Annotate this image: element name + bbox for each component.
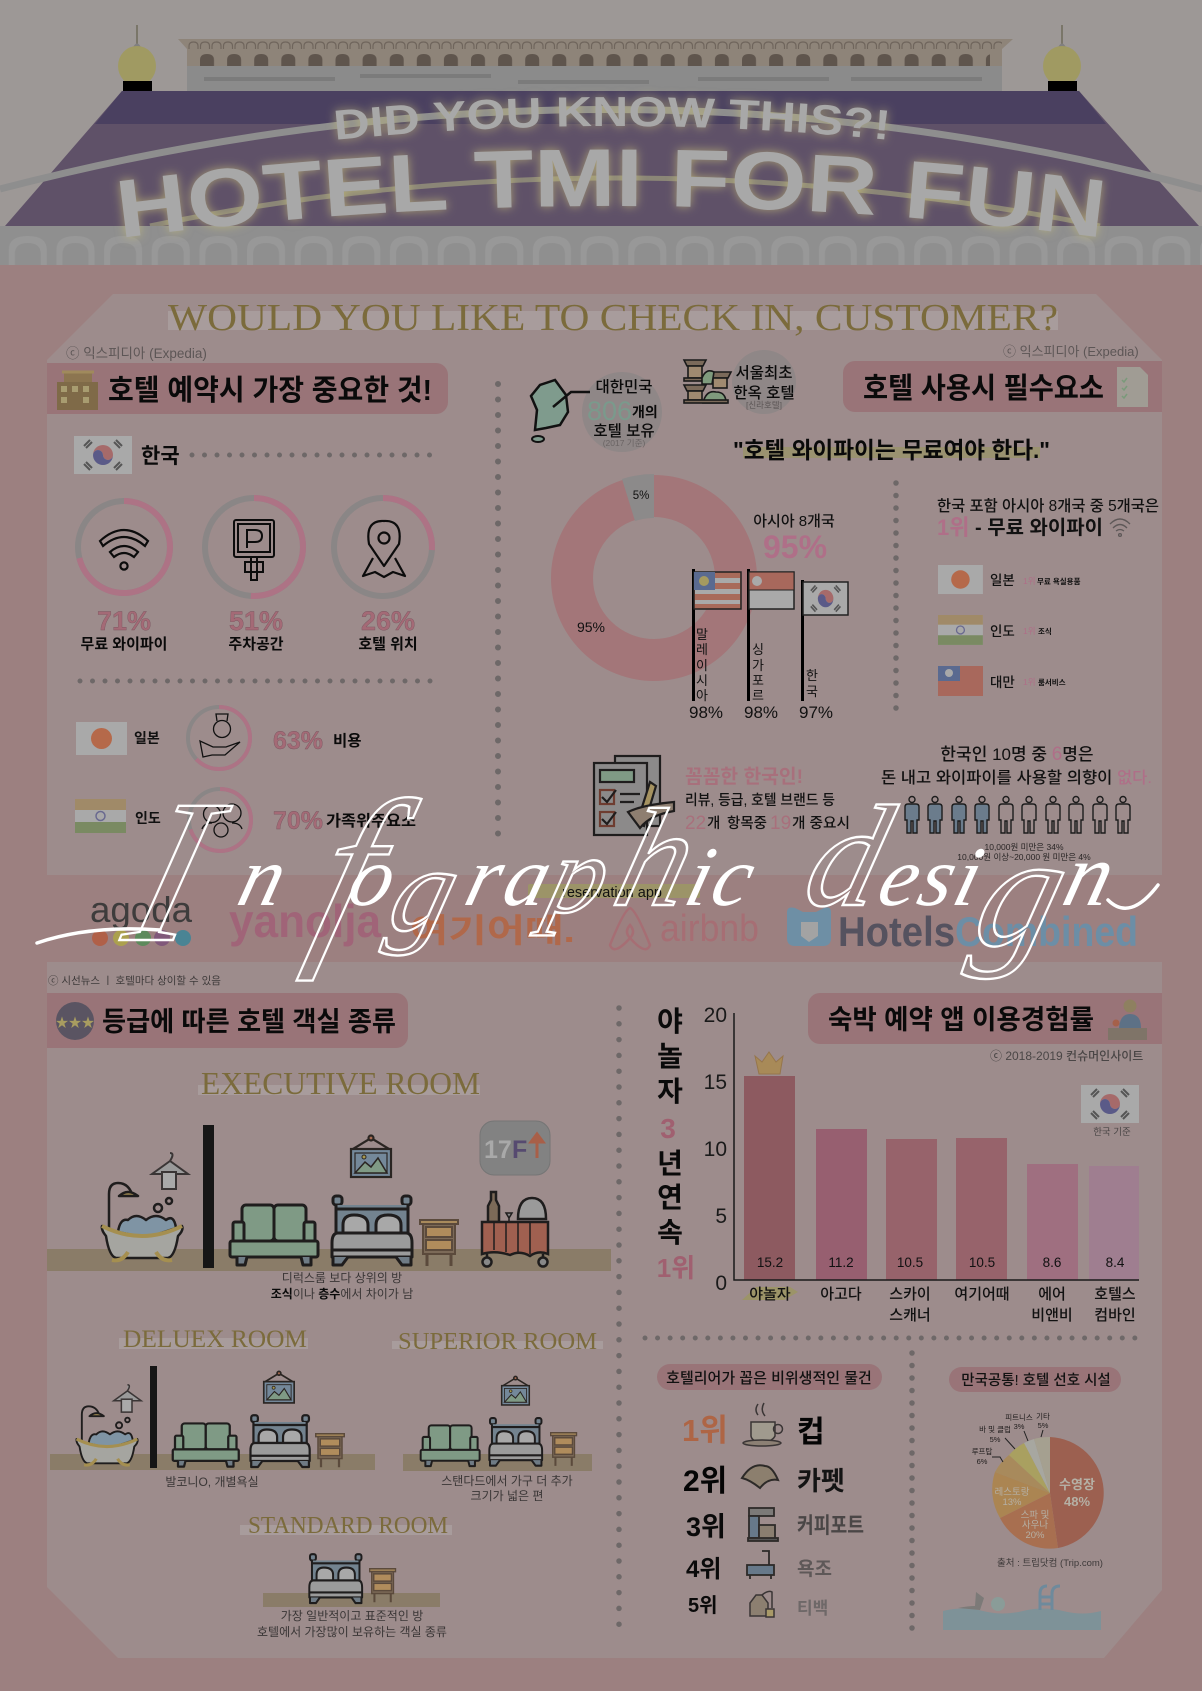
- logo: hotelscombined: [787, 908, 1138, 955]
- section heading: [808, 993, 1162, 1044]
- watermark: infographic design: [107, 758, 1144, 985]
- pie chart: 기타: [1036, 1412, 1050, 1421]
- bar chart: 15: [704, 1071, 727, 1094]
- icon: receptionist: [1108, 1000, 1147, 1040]
- rank 2 carpet: 카펫: [797, 1466, 845, 1496]
- pie chart: 5%: [1038, 1421, 1049, 1430]
- executive room scene: [47, 1121, 611, 1271]
- icon: small wifi: [1110, 519, 1130, 536]
- logo: hotelscombined: Hotels: [838, 908, 955, 955]
- bar chart: 에어: [1038, 1286, 1066, 1303]
- bar chart: 10.5: [897, 1255, 923, 1270]
- korea standard note: 한국 기준: [1093, 1127, 1131, 1138]
- pie source: 출처 : 트립닷컴 (Trip.com): [997, 1557, 1103, 1569]
- value 70: 70%: [273, 807, 323, 835]
- meticulous koreans text: 22: [685, 813, 706, 834]
- executive caption: 조식이나 층수에서 차이가 남: [271, 1287, 413, 1301]
- meticulous koreans text: 개: [707, 815, 720, 832]
- rank 4 tub: [686, 1551, 832, 1583]
- watermark: infographic design: s: [910, 829, 968, 924]
- rank 5 tea bag: 5위: [688, 1594, 718, 1617]
- logo: agoda: [90, 889, 193, 946]
- meticulous koreans text: [685, 766, 850, 834]
- watermark: infographic design: o: [340, 829, 407, 924]
- flag: korea standard: [1081, 1085, 1139, 1123]
- flag: india: [75, 799, 126, 833]
- icon: room service cart: [482, 1192, 548, 1266]
- bar chart: 스캐너: [889, 1307, 931, 1324]
- japan row: 일본: [990, 573, 1015, 588]
- pie chart: 바 및 클럽: [979, 1424, 1011, 1434]
- japan row: 무료 욕실용품: [1037, 576, 1081, 586]
- pie chart: [972, 1412, 1104, 1549]
- donut chart: 95%: [577, 619, 605, 635]
- vertical slogan: 3: [660, 1113, 676, 1144]
- watermark: infographic design: d: [791, 775, 908, 936]
- japan label: 일본: [134, 730, 160, 746]
- rank 1 cup: 컵: [797, 1416, 825, 1449]
- flag: korea pole: 한: [806, 668, 818, 683]
- bar chart: 스카이: [889, 1286, 931, 1303]
- panel: room types: [47, 993, 611, 1639]
- bar chart: 10.5: [969, 1255, 995, 1270]
- taiwan row: 대만: [990, 675, 1015, 690]
- vertical slogan: 놀: [657, 1041, 683, 1072]
- value 51: 51%: [229, 606, 283, 636]
- icon: 17F badge: [480, 1121, 550, 1175]
- logo: hotelscombined: Combined: [955, 908, 1138, 955]
- pie chart: 레스토랑: [995, 1486, 1030, 1498]
- watermark: infographic design: g: [959, 804, 1087, 980]
- standard caption: [257, 1609, 447, 1639]
- heading text: 숙박 예약 앱 이용경험률: [828, 1005, 1094, 1035]
- icon: pool: [943, 1586, 1101, 1630]
- six in ten koreans text: 돈 내고 와이파이를 사용할 의향이 없다.: [881, 769, 1152, 787]
- meticulous koreans text: 리뷰, 등급, 호텔 브랜드 등: [685, 792, 835, 809]
- taiwan row: 1위: [1023, 677, 1036, 687]
- highlight for yanolja: [742, 1287, 798, 1300]
- logo band background: [47, 875, 1162, 962]
- bar chart: 컴바인: [1094, 1307, 1136, 1324]
- watermark: infographic design: i: [945, 829, 993, 924]
- flag: japan: [76, 722, 127, 755]
- panel: booking app usage: [657, 993, 1162, 1324]
- donut chart: [572, 474, 736, 660]
- superior caption: 크기가 넓은 편: [471, 1489, 543, 1503]
- icon: 17F badge: 17: [484, 1136, 512, 1164]
- meticulous koreans text: 개 중요시: [792, 815, 850, 832]
- icon: checklist with hand: [594, 756, 674, 835]
- bar chart: 5: [715, 1205, 727, 1228]
- hotel count text: 개의: [632, 404, 658, 420]
- bar chart: 비앤비: [1031, 1307, 1073, 1324]
- superior room heading: SUPERIOR ROOM: [398, 1329, 597, 1355]
- section heading: [843, 361, 1162, 412]
- panel: essentials when using hotel: [572, 344, 1162, 862]
- hotel count text: [587, 378, 658, 448]
- vertical slogan: 1위: [657, 1253, 695, 1283]
- bar chart: 아고다: [820, 1286, 862, 1303]
- icon: stars badge: [55, 1002, 95, 1040]
- flag: korea: [74, 436, 132, 474]
- icon: crown: [755, 1052, 783, 1074]
- pie chart: 13%: [1002, 1497, 1022, 1508]
- first hanok hotel text: [733, 364, 795, 410]
- bar chart: 8.4: [1106, 1255, 1125, 1270]
- icon: hanok: [684, 360, 731, 403]
- subtitle: would you like to check in: WOULD YOU LIKE TO CHECK IN, CUSTOMER?: [168, 297, 1058, 339]
- bar chart: 10: [704, 1138, 727, 1161]
- watermark: infographic design: i: [677, 829, 725, 924]
- flag: malaysia: 아: [696, 688, 708, 703]
- watermark: infographic design: h: [601, 780, 713, 935]
- meticulous koreans text: 꼼꼼한 한국인!: [685, 766, 803, 788]
- meticulous koreans text: 19: [770, 813, 791, 834]
- ring: free wifi 71%: [78, 501, 170, 593]
- india row: 인도: [990, 624, 1015, 639]
- ring: location 26%: [334, 498, 432, 596]
- first hanok hotel text: 서울최초: [735, 364, 793, 382]
- ring: cost 63%: [188, 707, 250, 769]
- icon: family: [202, 804, 242, 837]
- india row: 1위: [1023, 626, 1036, 636]
- label family: 가족위주요소: [326, 812, 416, 830]
- six in ten koreans text: 한국인 10명 중 6명은: [940, 744, 1094, 765]
- icon: map pin: [363, 521, 405, 577]
- pie chart: 6%: [977, 1457, 988, 1466]
- bar chart: 15.2: [757, 1255, 783, 1270]
- first hanok hotel text: 한옥 호텔: [733, 384, 795, 402]
- india label: 인도: [135, 810, 161, 826]
- bar chart: 호텔스: [1094, 1286, 1136, 1303]
- watermark: infographic design: p: [529, 815, 624, 937]
- vertical slogan: 년: [657, 1148, 683, 1179]
- source note: ⓒ 익스피디아 (Expedia): [1003, 344, 1139, 359]
- source note: ⓒ 2018-2019 컨슈머인사이트: [990, 1049, 1143, 1063]
- panel: reservation app logos: [90, 884, 1138, 955]
- watermark: infographic design: e: [870, 829, 933, 924]
- flag: malaysia: 이: [696, 658, 708, 673]
- inner panel: [47, 294, 1162, 1658]
- bar chart: 11.2: [828, 1255, 854, 1270]
- wifi price note: [957, 842, 1091, 862]
- pie chart: 48%: [1064, 1494, 1090, 1509]
- hotel count text: 대한민국: [595, 378, 653, 396]
- meticulous koreans text: 항목중: [727, 815, 767, 832]
- panel: korea hotel facts: [531, 350, 796, 452]
- taiwan row: [938, 666, 1066, 696]
- icon: wifi: [100, 530, 148, 570]
- ring: family 70%: [189, 789, 251, 851]
- pie chart: 스파 및: [1021, 1509, 1050, 1521]
- flag: singapore: [744, 569, 794, 722]
- hotel count text: 호텔 보유: [593, 422, 655, 440]
- bar chart: 야놀자: [749, 1286, 791, 1303]
- watermark: infographic design: a: [495, 829, 562, 924]
- pill heading: [949, 1367, 1121, 1392]
- logo: yanolja: yanolja: [229, 895, 381, 947]
- asia rank headline: 한국 포함 아시아 8개국 중 5개국은: [937, 497, 1159, 515]
- flag: singapore: 포: [752, 673, 764, 688]
- japan row: [938, 565, 1081, 594]
- asia rank headline: [937, 497, 1159, 540]
- icon: korea map: [531, 380, 590, 442]
- rank 5 tea bag: [688, 1591, 828, 1618]
- flag: korea pole: 97%: [799, 703, 833, 722]
- donut chart: 5%: [633, 490, 649, 502]
- standard room heading: STANDARD ROOM: [248, 1513, 448, 1539]
- rank 3 coffee pot: 커피포트: [797, 1513, 864, 1538]
- pie chart: 5%: [990, 1435, 1001, 1444]
- watermark: infographic design: g: [378, 824, 473, 957]
- gray badge circles: [582, 350, 796, 452]
- superior caption: [441, 1474, 573, 1503]
- rank 3 coffee pot: [686, 1508, 864, 1542]
- flag: singapore: 르: [752, 688, 764, 703]
- rank 3 coffee pot: 3위: [686, 1512, 726, 1542]
- taiwan row: 룸서비스: [1038, 677, 1066, 687]
- first hanok hotel text: [신라호텔]: [746, 400, 782, 410]
- highlight and label: [528, 884, 700, 901]
- hotel count text: 806: [587, 396, 632, 426]
- korea label: 한국: [141, 445, 180, 468]
- rank 2 carpet: [683, 1465, 845, 1498]
- label free wifi: 무료 와이파이: [81, 636, 167, 653]
- watermark: infographic design: r: [457, 829, 515, 924]
- hotel rooftop illustration: [0, 25, 1202, 265]
- logo: yeogi: 여기어때.: [410, 912, 575, 949]
- watermark flourish: [37, 885, 1158, 943]
- asia 95 percent: 95%: [763, 529, 827, 565]
- pill heading: 만국공통! 호텔 선호 시설: [961, 1372, 1111, 1389]
- executive room heading: EXECUTIVE ROOM: [201, 1065, 480, 1101]
- japan row: 1위: [1023, 576, 1036, 586]
- vertical slogan: [657, 1006, 695, 1283]
- title: hotel tmi for fun: HOTEL TMI FOR FUN: [115, 144, 1108, 240]
- people pictogram: [905, 796, 1130, 833]
- quote text: "호텔 와이파이는 무료여야 한다.": [733, 437, 1050, 463]
- india row: [938, 615, 1052, 645]
- logo: agoda: agoda: [90, 889, 193, 930]
- watermark: infographic design: c: [703, 829, 766, 924]
- value 63: 63%: [273, 727, 323, 755]
- flag: korea pole: 국: [806, 684, 818, 699]
- label parking: 주차공간: [228, 636, 284, 653]
- deluxe room scene: [50, 1366, 375, 1470]
- flag: singapore: 가: [752, 658, 764, 673]
- rank 5 tea bag: 티백: [797, 1599, 828, 1618]
- bar chart: 8.6: [1043, 1255, 1061, 1270]
- quote highlight: [743, 447, 1040, 458]
- section heading: [47, 363, 448, 414]
- flag: singapore: 98%: [744, 703, 778, 722]
- heading text: 호텔 예약시 가장 중요한 것!: [108, 374, 432, 407]
- icon: 17F badge: F: [512, 1136, 527, 1164]
- superior room scene: [403, 1376, 592, 1471]
- rank 2 carpet: 2위: [683, 1465, 727, 1498]
- standard room scene: [263, 1554, 440, 1607]
- pie chart: 수영장: [1059, 1477, 1095, 1492]
- rank 4 tub: 4위: [686, 1556, 721, 1583]
- bar chart: [704, 1004, 1139, 1324]
- pill heading: [657, 1364, 882, 1390]
- executive caption: 디럭스룸 보다 상위의 방: [282, 1271, 402, 1285]
- watermark: infographic design: n: [230, 829, 297, 924]
- bar chart: 20: [704, 1004, 727, 1027]
- superior caption: 스탠다드에서 가구 더 추가: [441, 1474, 573, 1488]
- label cost: 비용: [333, 732, 362, 750]
- icon: stars badge: ★★★: [55, 1015, 95, 1030]
- source note: room types: ⓒ 시선뉴스 ㅣ 호텔마다 상이할 수 있음: [48, 975, 221, 987]
- flag: malaysia: 시: [696, 673, 708, 688]
- sky: [0, 0, 1202, 265]
- six in ten koreans text: [881, 744, 1152, 787]
- pie chart: 20%: [1025, 1530, 1045, 1541]
- panel: most important when booking: [47, 346, 448, 851]
- logo: airbnb: [610, 908, 759, 950]
- rank 1 cup: [682, 1403, 825, 1449]
- vertical slogan: 자: [657, 1076, 683, 1107]
- vertical slogan: 연: [657, 1182, 683, 1213]
- vertical slogan: 야: [657, 1006, 683, 1037]
- watermark: infographic design: f: [294, 761, 432, 982]
- panel: unhygienic items: [657, 1364, 882, 1618]
- pie chart: 사우나: [1022, 1520, 1048, 1531]
- bar chart: 0: [715, 1272, 727, 1295]
- vertical slogan: 속: [657, 1217, 683, 1248]
- flag: malaysia: 말: [696, 627, 708, 642]
- india row: 조식: [1038, 626, 1052, 636]
- logo: airbnb: airbnb: [660, 908, 759, 950]
- watermark: infographic design: I: [107, 758, 245, 985]
- pie chart: 3%: [1014, 1422, 1025, 1431]
- flag: korea pole: [799, 580, 848, 722]
- executive caption: [271, 1271, 413, 1301]
- heading text: 등급에 따른 호텔 객실 종류: [102, 1007, 396, 1037]
- icon: parking sign: [234, 520, 274, 580]
- source note: ⓒ 익스피디아 (Expedia): [66, 346, 207, 361]
- asia rank headline: 1위: [937, 515, 969, 540]
- flag: malaysia: 레: [696, 642, 708, 657]
- bar chart: 여기어때: [954, 1286, 1010, 1303]
- flag: malaysia: [689, 569, 741, 722]
- rank 4 tub: 욕조: [797, 1559, 832, 1580]
- section heading: [47, 993, 408, 1048]
- icon: money hand: [200, 714, 240, 757]
- hotel count text: (2017 기준): [603, 438, 645, 448]
- title: did you know this: DID YOU KNOW THIS?!: [330, 91, 892, 144]
- asia 8 countries label: 아시아 8개국: [753, 513, 835, 530]
- pie chart: 루프탑: [972, 1447, 992, 1456]
- icon: hotel building: [57, 372, 98, 410]
- pie chart: 피트니스: [1005, 1413, 1033, 1422]
- value 71: 71%: [97, 606, 151, 636]
- wifi price note: 10,000원 미만은 34%: [984, 842, 1064, 852]
- label location: 호텔 위치: [358, 636, 418, 653]
- deluxe caption: 발코니O, 개별욕실: [165, 1475, 259, 1489]
- standard caption: 가장 일반적이고 표준적인 방: [281, 1609, 423, 1623]
- icon: checklist doc: [1117, 367, 1148, 407]
- pill heading: 호텔리어가 꼽은 비위생적인 물건: [666, 1370, 872, 1387]
- flag: singapore: 싱: [752, 642, 764, 657]
- ring: parking 51%: [205, 498, 303, 596]
- flag: malaysia: 98%: [689, 703, 723, 722]
- highlight and label: reservation app: [562, 885, 662, 901]
- asia rank headline: - 무료 와이파이: [975, 517, 1103, 539]
- wifi price note: 10,000원 이상~20,000 원 미만은 4%: [957, 852, 1091, 862]
- deluxe room heading: DELUEX ROOM: [123, 1326, 307, 1353]
- panel: preferred facilities: [943, 1367, 1121, 1630]
- heading text: 호텔 사용시 필수요소: [863, 372, 1104, 405]
- rank 1 cup: 1위: [682, 1413, 728, 1448]
- standard caption: 호텔에서 가장많이 보유하는 객실 종류: [257, 1625, 447, 1639]
- watermark: infographic design: n: [1054, 824, 1126, 925]
- value 26: 26%: [361, 606, 415, 636]
